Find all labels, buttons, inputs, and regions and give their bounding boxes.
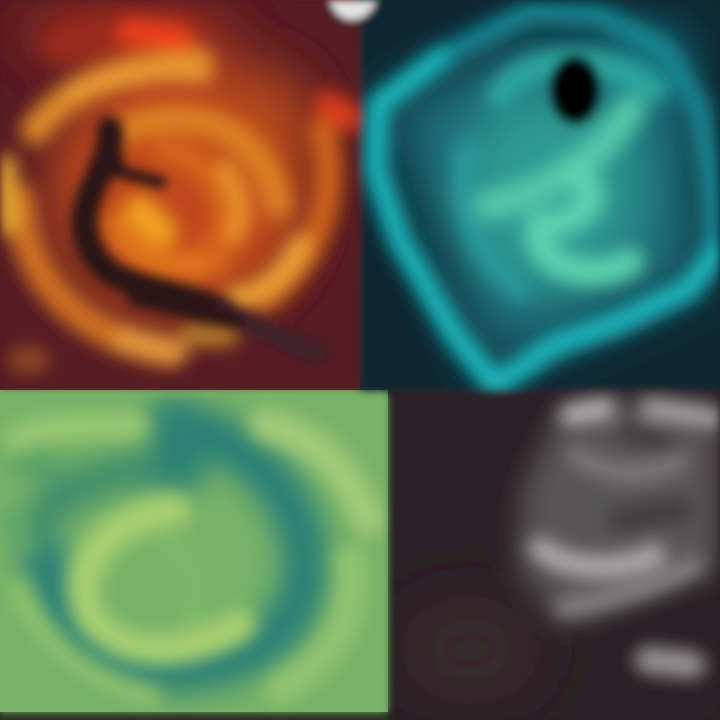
fire swirl ring: [6, 32, 350, 360]
panel: fire: [0, 0, 360, 388]
air bright streaks: [540, 408, 715, 665]
water polygon outline: [376, 12, 714, 385]
earth light patches: [10, 425, 368, 698]
earth teal swirl: [20, 418, 305, 670]
water inner swirl: [464, 62, 655, 290]
water inner glow: [385, 30, 700, 370]
panel: water: [360, 0, 720, 392]
air background haze: [422, 615, 518, 685]
black eye: [551, 57, 599, 123]
fire glow: [20, 10, 315, 320]
top white spot: [330, 0, 376, 20]
panel: air: [390, 390, 720, 720]
panel: earth: [0, 396, 386, 712]
air gray form: [518, 398, 720, 625]
silhouette creature: [85, 122, 318, 354]
